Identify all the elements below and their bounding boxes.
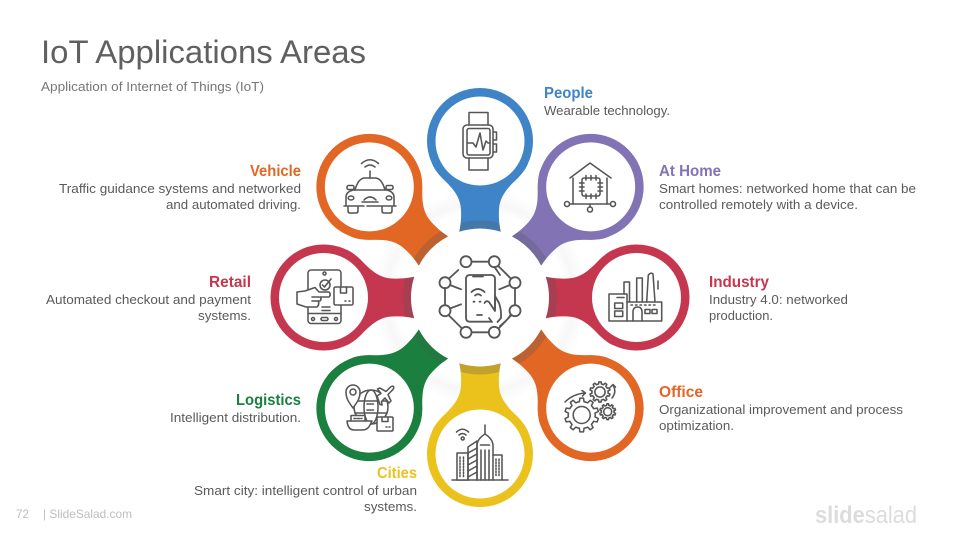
petal: vehicle [294,112,471,288]
label: office: Office [659,384,703,401]
label: vehicle [59,163,301,212]
label: industry: Industry 4.0: networked [709,292,848,307]
label: cities: Cities [377,465,417,482]
icon: factory [609,273,662,321]
label: industry: Industry [709,274,769,291]
subtitle: Application of Internet of Things (IoT) [41,79,264,94]
label: retail [46,274,251,323]
label: office [659,384,904,433]
label: at home [659,163,916,212]
label: vehicle: Vehicle [250,163,301,180]
label: at home: At Home [659,163,721,180]
label: people [544,85,670,118]
footer: page number: 72 [16,507,29,521]
label: at home: Smart homes: networked home that can be [659,181,916,196]
label: logistics: Intelligent distribution. [170,410,301,425]
label: at home: controlled remotely with a device. [659,197,858,212]
label: industry: production. [709,308,773,323]
icon: logistics globe [346,385,394,431]
label: cities: systems. [364,499,417,514]
center circle [414,231,546,364]
title: IoT Applications Areas [41,34,366,70]
petal: industry [546,244,690,350]
label: retail: Automated checkout and payment [46,292,251,307]
label: vehicle: and automated driving. [166,197,301,212]
icon: connected car [344,160,396,213]
label: vehicle: Traffic guidance systems and networked [59,181,301,196]
label: people: People [544,85,593,102]
label: office: optimization. [659,418,734,433]
label: cities [194,465,417,514]
label: logistics [170,392,301,425]
icon: smartwatch [463,112,496,170]
icon: city buildings [452,425,508,480]
label: logistics: Logistics [236,392,301,409]
footer: site name: | SlideSalad.com [43,507,132,521]
label: retail: Retail [209,274,251,291]
petal: retail [270,244,414,350]
label: office: Organizational improvement and process [659,402,904,417]
petal: cities [427,363,533,507]
label: industry [709,274,848,323]
petal: people [427,88,533,232]
icon: smart home [564,163,616,212]
label: people: Wearable technology. [544,103,670,118]
icon: gears [564,382,616,432]
icon: retail phone [297,270,353,324]
petal: office [489,307,666,483]
label: retail: systems. [198,308,251,323]
label: cities: Smart city: intelligent control of urban [194,483,417,498]
logo: slidesalad [815,502,917,529]
center halo [372,190,588,406]
petal: logistics [294,307,471,483]
icon: IoT phone network [440,256,520,338]
petal: at home [489,112,666,288]
